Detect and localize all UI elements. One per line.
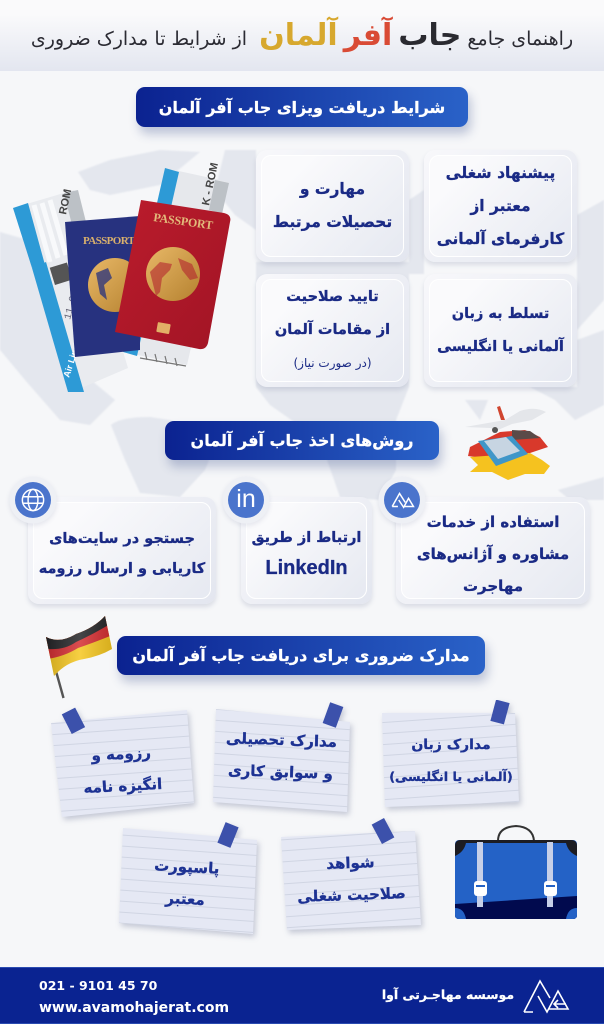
note text: passport — [154, 856, 220, 909]
note text: qualification: صلاحیت شغلی — [297, 884, 406, 906]
footer contact: 021 - 9101 45 70 — [39, 978, 157, 993]
right boarding pass: K - ROM — [200, 162, 221, 207]
footer contact: www.avamohajerat.com — [39, 1000, 229, 1016]
left boarding pass: ROM — [57, 188, 74, 216]
note text: resume — [83, 743, 163, 797]
note paper: passport — [119, 828, 257, 934]
note text: passport: معتبر — [165, 889, 205, 909]
note text: language — [389, 737, 513, 785]
card: qualification: تایید صلاحیت — [286, 289, 379, 305]
left boarding pass: 11.03.17 — [63, 272, 86, 321]
card: qualification — [256, 274, 409, 387]
blue passport: PASSPORT — [83, 235, 136, 247]
card: qualification: از مقامات آلمان — [275, 322, 390, 338]
note text: language: مدارک زبان — [411, 737, 491, 753]
note paper: resume — [51, 710, 194, 817]
footer — [0, 967, 604, 1024]
passports and boarding passes illustration — [13, 162, 230, 392]
card: linkedin — [241, 497, 372, 604]
icon: suitcase — [455, 825, 577, 919]
card: job offer: معتبر از — [470, 196, 531, 214]
note paper: language — [382, 713, 519, 807]
card: skills — [256, 150, 409, 262]
card: job offer: کارفرمای آلمانی — [437, 230, 564, 248]
card: consulting services: مهاجرت — [463, 577, 523, 595]
note paper: education — [213, 709, 350, 812]
note text: qualification — [297, 853, 406, 906]
icon: linkedin: in — [236, 485, 256, 513]
icon: linkedin — [228, 482, 264, 518]
note text: education: مدارک تحصیلی — [226, 729, 337, 751]
heading: required documents — [117, 636, 485, 675]
header band — [0, 0, 604, 71]
icon: agency logo — [384, 482, 420, 518]
card: skills: تحصیلات مرتبط — [273, 213, 392, 231]
blue passport — [65, 216, 142, 357]
note papers — [51, 700, 524, 940]
heading: ways to get a job offer: روش‌های اخذ جاب آفر آلمان — [191, 431, 413, 450]
card: language: آلمانی یا انگلیسی — [437, 338, 564, 354]
icon: german flag — [46, 616, 112, 698]
icon: globe — [15, 482, 51, 518]
note paper: qualification — [281, 831, 421, 930]
heading: required documents: مدارک ضروری برای دریافت جاب آفر آلمان — [132, 646, 470, 665]
heading: ways to get a job offer — [165, 421, 439, 460]
left boarding pass: Air Lines — [61, 339, 83, 379]
note text: passport: پاسپورت — [154, 856, 220, 878]
note text: education: و سوابق کاری — [228, 761, 333, 783]
red passport: PASSPORT — [153, 210, 214, 232]
icon: germany map with plane — [466, 406, 550, 480]
card: consulting services: استفاده از خدمات — [427, 513, 559, 531]
card: consulting services — [396, 497, 590, 604]
card: job sites: جستجو در سایت‌های — [49, 531, 195, 547]
note text: resume: انگیزه نامه — [83, 775, 163, 797]
note text: resume: رزومه و — [91, 743, 151, 765]
card: consulting services: مشاوره و آژانس‌های — [417, 545, 569, 563]
note text: language: (آلمانی یا انگلیسی) — [389, 770, 513, 785]
card: skills: مهارت و — [300, 180, 365, 198]
heading: visa conditions — [136, 87, 468, 127]
left boarding pass — [13, 188, 128, 392]
card: language — [424, 274, 577, 387]
footer logo — [523, 979, 570, 1014]
card: qualification: (در صورت نیاز) — [293, 356, 372, 370]
red passport — [115, 200, 230, 349]
note text: qualification: شواهد — [326, 853, 375, 873]
tape — [62, 700, 510, 848]
card: linkedin: ارتباط از طریق — [252, 530, 361, 546]
card: job offer — [424, 150, 577, 262]
footer contact — [39, 978, 229, 1016]
card: linkedin: LinkedIn — [265, 557, 348, 579]
card: job sites — [28, 497, 216, 604]
heading: visa conditions: شرایط دریافت ویزای جاب آفر آلمان — [159, 98, 445, 116]
card: job offer: پیشنهاد شغلی — [446, 164, 555, 182]
footer brand name: موسسه مهاجـرتی آوا — [382, 987, 514, 1002]
card: job sites: کاریابی و ارسال رزومه — [39, 561, 205, 577]
card: language: تسلط به زبان — [452, 306, 549, 322]
note text: education — [226, 729, 337, 783]
right boarding pass — [123, 162, 229, 366]
title: راهنمای جامع جاب آفر آلمان از شرایط تا مدارک ضروری — [31, 18, 573, 52]
